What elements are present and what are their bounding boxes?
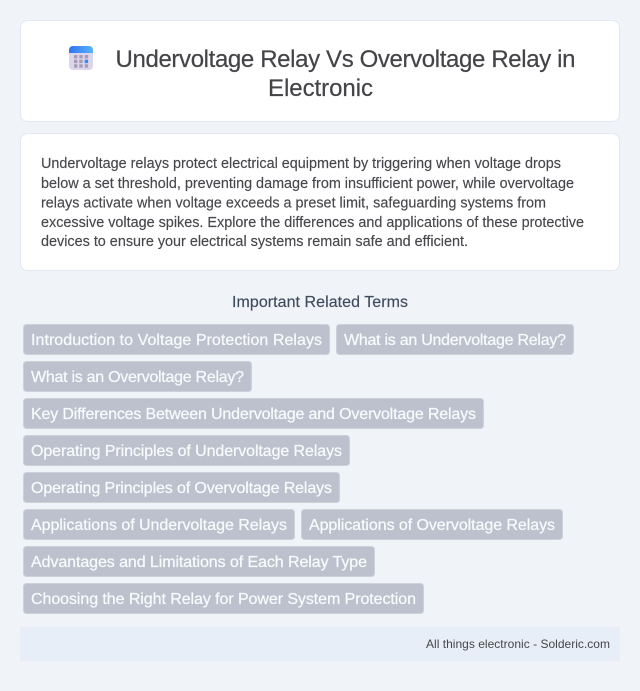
chip: advantages <box>24 546 374 576</box>
chip: what is undervoltage: What is an Undervoltage Relay? <box>344 332 566 349</box>
chip: operating undervoltage <box>24 436 350 466</box>
panel: description card: below a set threshold, preventing damage from insufficient power, while overvoltage <box>41 176 574 192</box>
title: Undervoltage Relay Vs Overvoltage Relay in <box>116 46 576 73</box>
icon: calendar <box>69 46 93 70</box>
title: Electronic <box>268 75 373 102</box>
chip: what is overvoltage: What is an Overvoltage Relay? <box>31 369 244 386</box>
chip: choosing: Choosing the Right Relay for Power System Protection <box>31 591 416 608</box>
chip: key differences: Key Differences Between Undervoltage and Overvoltage Relays <box>31 406 476 423</box>
chip: what is undervoltage <box>336 324 574 354</box>
chip: operating undervoltage: Operating Principles of Undervoltage Relays <box>31 443 342 460</box>
chip: applications overvoltage: Applications of Overvoltage Relays <box>309 517 555 534</box>
panel: description card: excessive voltage spikes. Explore the differences and applications of these protective <box>41 215 584 231</box>
chip: operating overvoltage <box>24 472 340 502</box>
chip: choosing <box>24 584 424 614</box>
title <box>116 46 576 102</box>
chip: what is overvoltage <box>24 362 252 392</box>
footer: All things electronic - Solderic.com <box>426 637 610 651</box>
panel: description card: devices to ensure your electrical systems remain safe and efficient. <box>41 234 468 250</box>
chip: introduction: Introduction to Voltage Protection Relays <box>31 332 322 349</box>
chip: operating overvoltage: Operating Principles of Overvoltage Relays <box>31 480 332 497</box>
panel: description card: Undervoltage relays protect electrical equipment by triggering when voltage drops <box>41 156 561 172</box>
chip: applications undervoltage: Applications of Undervoltage Relays <box>31 517 287 534</box>
chip: applications undervoltage <box>24 510 294 540</box>
chip: key differences <box>24 398 484 428</box>
footer <box>20 627 620 661</box>
panel: header card <box>20 20 620 122</box>
chip: introduction <box>24 324 330 354</box>
panel: description card: relays activate when voltage exceeds a preset limit, safeguarding systems from <box>41 196 546 212</box>
panel: description card <box>20 134 620 270</box>
panel: related terms chips <box>24 324 574 614</box>
chip: applications overvoltage <box>302 510 562 540</box>
chip: advantages: Advantages and Limitations of Each Relay Type <box>31 554 367 571</box>
heading: important related terms: Important Related Terms <box>232 294 408 311</box>
